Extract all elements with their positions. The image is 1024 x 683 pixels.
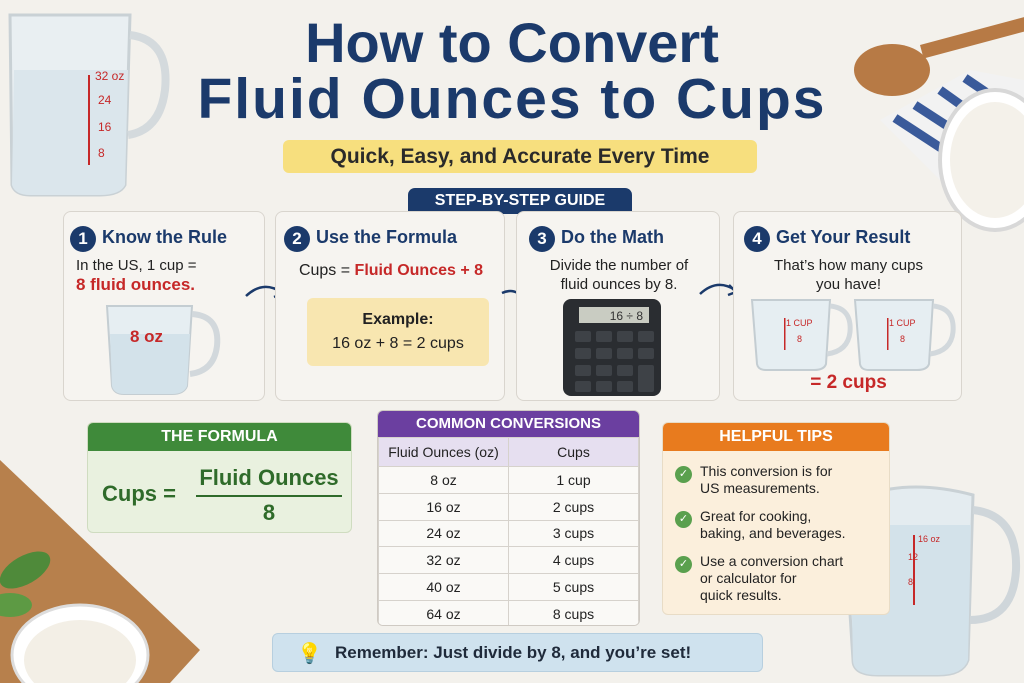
example box bbox=[307, 298, 489, 366]
decoration: top-left measuring cup bbox=[8, 14, 170, 196]
arrow 1 bbox=[245, 286, 275, 298]
icon: lightbulb: 💡 bbox=[297, 643, 322, 665]
decoration: bottom-right measuring cup: 122 bbox=[873, 552, 888, 562]
table: common conversions: 40 oz bbox=[426, 579, 461, 595]
tip 2: Great for cooking, bbox=[700, 508, 811, 524]
title bbox=[197, 11, 826, 131]
panel: step 1 bbox=[63, 211, 265, 401]
heading: step 4: 4 bbox=[752, 229, 762, 248]
tip 3: Use a conversion chart bbox=[700, 553, 843, 569]
decoration: top-left measuring cup: 16 bbox=[98, 120, 112, 134]
banner: remember bbox=[272, 633, 763, 672]
panel: step 4 bbox=[733, 211, 962, 401]
text: divide: Divide the number of bbox=[550, 257, 688, 274]
tip 2 bbox=[675, 508, 846, 541]
panel: step 3 bbox=[516, 211, 720, 401]
text: result bbox=[774, 257, 923, 293]
text: divide bbox=[550, 257, 688, 293]
heading: step 3 bbox=[529, 226, 664, 252]
subtitle: Quick, Easy, and Accurate Every Time bbox=[331, 145, 709, 168]
tip 3 bbox=[675, 553, 844, 603]
tip 2: baking, and beverages. bbox=[700, 525, 846, 541]
text: result: you have! bbox=[816, 276, 881, 293]
text: remember: Remember: Just divide by 8, and you’re set! bbox=[335, 643, 691, 662]
title: How to Convert bbox=[305, 11, 719, 74]
arrow 2 bbox=[502, 290, 516, 294]
heading: step 1 bbox=[70, 226, 227, 252]
heading: step 4: Get Your Result bbox=[776, 227, 910, 247]
formula text: Cups = Fluid Ounces + 8 bbox=[299, 262, 483, 279]
example box: 16 oz + 8 = 2 cups bbox=[332, 335, 464, 352]
icon: two cups: 1 CUP bbox=[786, 318, 813, 328]
table: common conversions: 24 oz bbox=[426, 525, 461, 541]
arrow 3 bbox=[699, 284, 733, 296]
tip 3: or calculator for bbox=[700, 570, 796, 586]
table: common conversions: 5 cups bbox=[553, 579, 594, 595]
table: common conversions: 64 oz bbox=[426, 606, 461, 622]
header: helpful tips: HELPFUL TIPS bbox=[719, 428, 833, 445]
tip 3: ✓ bbox=[679, 558, 688, 570]
decoration: spoon and towel top-right bbox=[854, 17, 1024, 232]
subtitle bbox=[283, 140, 757, 173]
title: Fluid Ounces to Cups bbox=[197, 67, 826, 131]
heading: step 2 bbox=[284, 226, 458, 252]
decoration: bottom-right measuring cup bbox=[848, 486, 1020, 676]
panel: the formula bbox=[87, 422, 352, 533]
heading: step 3: Do the Math bbox=[561, 227, 664, 247]
formula fraction: Cups = bbox=[102, 481, 176, 506]
panel: step 2 bbox=[275, 211, 505, 401]
heading: step 1: 1 bbox=[78, 229, 88, 248]
icon: two cups bbox=[751, 299, 956, 371]
heading: step 3: 3 bbox=[537, 229, 547, 248]
table: common conversions: 8 cups bbox=[553, 606, 594, 622]
tip 2: ✓ bbox=[679, 513, 688, 525]
tip 1: ✓ bbox=[679, 468, 688, 480]
icon: calculator: 16 ÷ 8 bbox=[610, 309, 643, 323]
table: common conversions: 4 cups bbox=[553, 552, 594, 568]
table: common conversions: Cups bbox=[557, 444, 590, 460]
header: the formula: THE FORMULA bbox=[161, 428, 278, 445]
panel: helpful tips bbox=[662, 422, 890, 615]
icon: cup 8 oz: 8 oz bbox=[130, 327, 163, 346]
table: common conversions bbox=[377, 410, 640, 626]
decoration: bottom-right measuring cup: 8 bbox=[878, 577, 883, 587]
table: common conversions: Fluid Ounces (oz) bbox=[388, 444, 499, 460]
tip 1: This conversion is for bbox=[700, 463, 832, 479]
table: common conversions: 32 oz bbox=[426, 552, 461, 568]
heading: step 2: Use the Formula bbox=[316, 227, 457, 247]
table: common conversions: 3 cups bbox=[553, 525, 594, 541]
formula fraction: Fluid Ounces bbox=[199, 465, 339, 490]
header: the formula bbox=[88, 423, 351, 451]
decoration: bottom-right measuring cup: 12 bbox=[908, 552, 918, 562]
text: divide: fluid ounces by 8. bbox=[561, 276, 677, 293]
table: common conversions: 2 cups bbox=[553, 499, 594, 515]
table: common conversions: 16 oz bbox=[426, 499, 461, 515]
heading: step 2: 2 bbox=[292, 229, 302, 248]
decoration: top-left measuring cup: 32 oz bbox=[95, 69, 124, 83]
heading: step 4 bbox=[744, 226, 910, 252]
tip 3: quick results. bbox=[700, 587, 782, 603]
header: common conversions: COMMON CONVERSIONS bbox=[416, 415, 601, 432]
heading: step 1: Know the Rule bbox=[102, 227, 227, 247]
decoration: top-left measuring cup: 8 bbox=[98, 146, 105, 160]
decoration: bottom-right measuring cup: 16 oz bbox=[918, 534, 941, 544]
tip 1 bbox=[675, 463, 832, 496]
decoration: top-left measuring cup: 24 bbox=[98, 93, 112, 107]
text: rule: 8 fluid ounces. bbox=[76, 275, 195, 294]
example box: Example: bbox=[362, 311, 434, 328]
icon: cup 8 oz bbox=[106, 305, 220, 395]
decoration: cutting board bottom-left bbox=[0, 460, 200, 683]
step-by-step tab: STEP-BY-STEP GUIDE bbox=[435, 192, 605, 209]
header: common conversions bbox=[378, 411, 639, 437]
step-by-step tab bbox=[408, 188, 632, 214]
icon: calculator bbox=[563, 299, 661, 396]
text: result: That’s how many cups bbox=[774, 257, 923, 274]
text: = 2 cups: = 2 cups bbox=[810, 372, 887, 393]
text: rule: In the US, 1 cup = bbox=[76, 257, 196, 274]
decoration: bottom-right measuring cup: 8 bbox=[908, 577, 913, 587]
table: common conversions: 1 cup bbox=[556, 472, 591, 488]
tip 1: US measurements. bbox=[700, 480, 820, 496]
header: helpful tips bbox=[663, 423, 889, 451]
formula fraction: 8 bbox=[263, 500, 275, 525]
text: rule bbox=[76, 257, 196, 294]
formula fraction bbox=[102, 465, 342, 525]
icon: two cups: 8 bbox=[797, 334, 802, 344]
table: common conversions: 8 oz bbox=[430, 472, 457, 488]
